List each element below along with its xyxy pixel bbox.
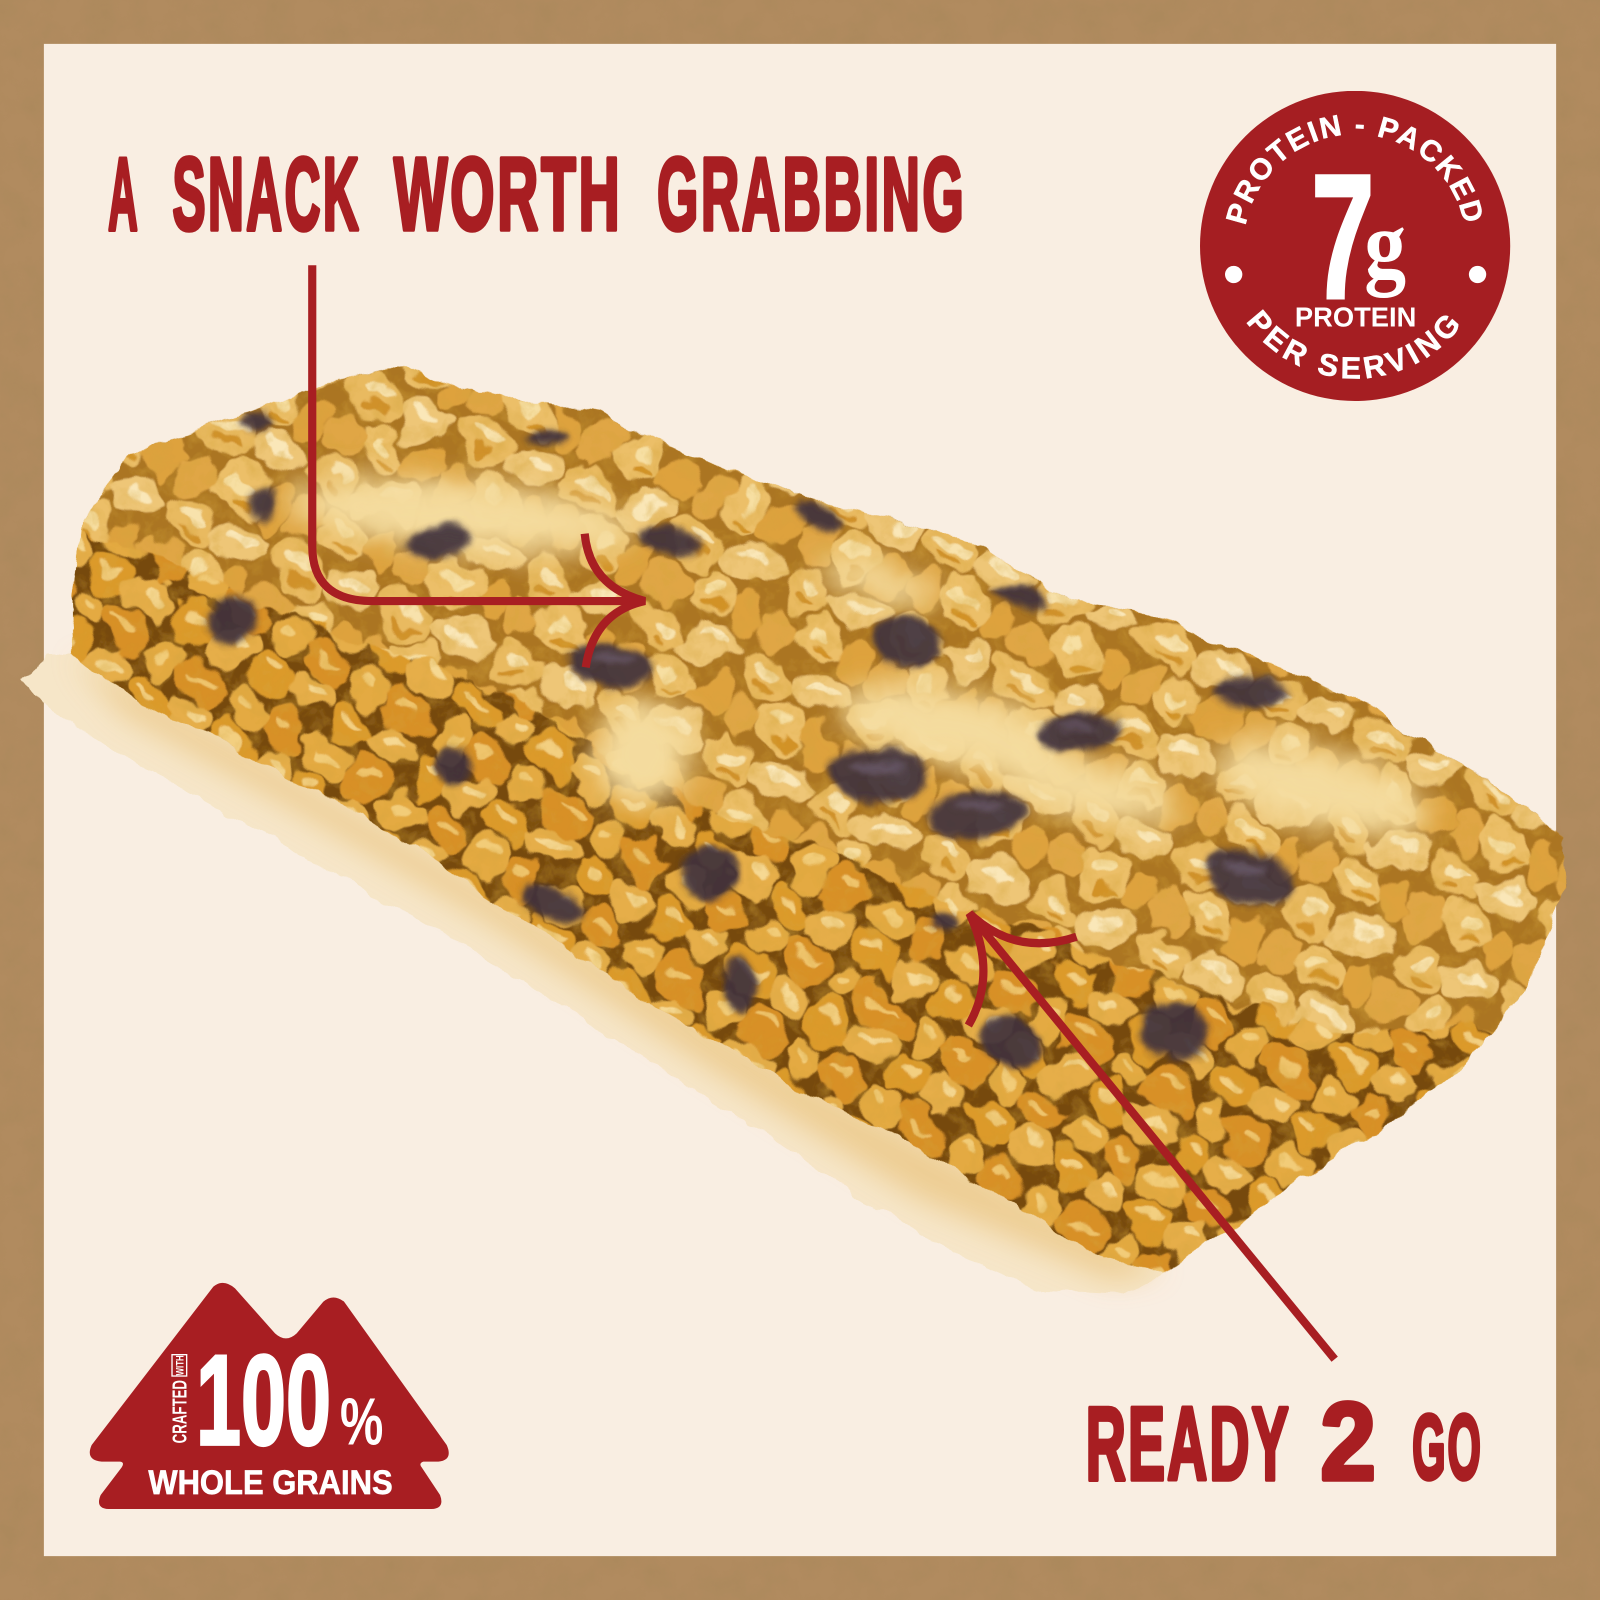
illustration: granola bar: [70, 366, 1567, 1273]
badge dot right: [1469, 266, 1486, 283]
badge unit g: g: [1364, 192, 1406, 298]
percent sign: %: [340, 1385, 383, 1459]
whole grains: WHOLE GRAINS: [148, 1464, 393, 1502]
label: ready 2 go: 2: [1320, 1381, 1380, 1504]
bar shadow wash: [22, 653, 1163, 1294]
heading: a snack worth grabbing: GRABBING: [657, 137, 966, 252]
crafted with: CRAFTED: [168, 1380, 191, 1443]
bar top face oats: [82, 366, 1567, 1035]
badge: 7g protein per serving: [1200, 91, 1510, 401]
badge top ring text: PROTEIN - PACKED: [1226, 114, 1482, 224]
heading: a snack worth grabbing: [108, 137, 966, 252]
chocolate chips: [198, 412, 1301, 1077]
badge: 100% whole grains mountain: [90, 1283, 449, 1509]
label: ready 2 go: READY: [1086, 1387, 1291, 1503]
badge bottom ring text: PER SERVING: [1246, 309, 1458, 379]
bar front face oats: [70, 366, 1566, 1272]
chip highlights: [592, 653, 1265, 873]
text: GO: [1412, 1397, 1483, 1499]
arrow: heading to bar: [312, 265, 645, 667]
badge dot left: [1225, 266, 1242, 283]
100: 100: [196, 1329, 331, 1472]
badge protein: PROTEIN: [1295, 302, 1416, 333]
badge number 7: 7: [1311, 137, 1374, 336]
arrow: ready 2 go to bar: [968, 913, 1335, 1359]
crafted with: WITH: [174, 1355, 186, 1375]
cream filling patches: [283, 466, 1440, 854]
heading: a snack worth grabbing: SNACK: [172, 137, 361, 252]
heading: a snack worth grabbing: WORTH: [394, 137, 622, 252]
heading: a snack worth grabbing: A: [108, 137, 140, 252]
